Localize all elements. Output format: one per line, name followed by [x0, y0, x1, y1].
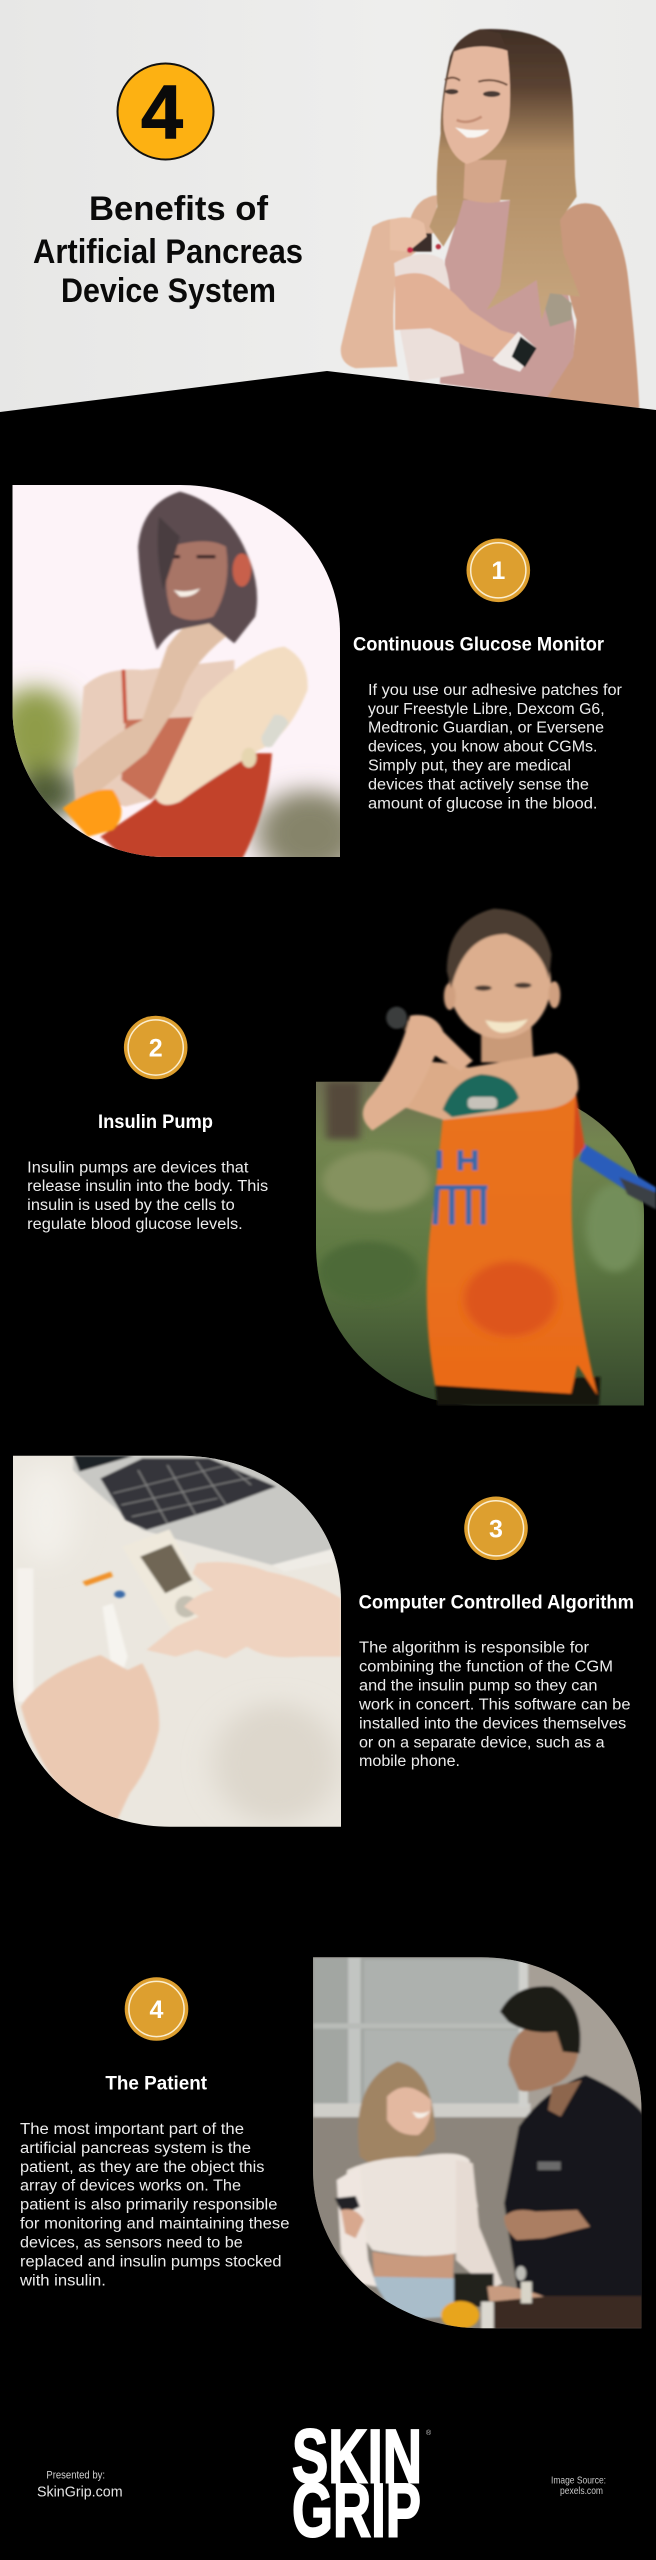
heading: Computer Controlled Algorithm: [359, 1591, 634, 1613]
number badge 1: 1: [491, 557, 505, 585]
presented by credit: Presented by:: [46, 2470, 105, 2482]
image source credit: [551, 2475, 606, 2497]
panel: 3 computer controlled algorithm: [0, 1450, 634, 1830]
body text: [358, 1640, 630, 1770]
heading: Continuous Glucose Monitor: [353, 634, 604, 656]
number badge 2: 2: [149, 1034, 163, 1062]
body text: with insulin.: [19, 2272, 106, 2289]
number badge 4: [125, 1977, 188, 2041]
title: Artificial Pancreas: [33, 233, 303, 271]
body text: combining the function of the CGM: [359, 1659, 613, 1676]
body text: insulin is used by the cells to: [27, 1197, 235, 1214]
body text: patient is also primarily responsible: [20, 2197, 277, 2214]
panel: 2 insulin pump: [27, 909, 656, 1410]
body text: [368, 682, 622, 812]
title: Device System: [61, 272, 276, 310]
body text: [19, 2121, 290, 2289]
body text: If you use our adhesive patches for: [368, 682, 622, 699]
body text: and the insulin pump so they can: [359, 1678, 598, 1695]
body text: amount of glucose in the blood.: [368, 795, 598, 812]
body text: work in concert. This software can be: [358, 1696, 630, 1713]
body text: patient, as they are the object this: [20, 2159, 265, 2176]
heading: Insulin Pump: [98, 1111, 213, 1133]
image source credit: Image Source:: [551, 2475, 606, 2486]
panel: header with woman photo: [0, 0, 656, 430]
panel: 1 continuous glucose monitor: [0, 480, 622, 877]
title: [33, 190, 303, 310]
panel: footer: [37, 2414, 606, 2554]
photo: woman wearing a glucose sensor: [12, 485, 340, 857]
body text: release insulin into the body. This: [27, 1178, 268, 1195]
panel: 4 the patient: [19, 1950, 645, 2335]
body text: [27, 1159, 268, 1233]
title: Benefits of: [89, 190, 269, 228]
photo: boy with baseball bat and arm patch: [310, 909, 656, 1410]
black chevron edge: [0, 371, 656, 430]
body text: mobile phone.: [359, 1753, 460, 1770]
presented by credit: [37, 2470, 123, 2501]
photo: woman holding a water bottle: [341, 29, 639, 408]
body text: devices, you know about CGMs.: [368, 739, 598, 756]
logo: Skin Grip: GRIP: [292, 2468, 421, 2554]
image source credit: pexels.com: [560, 2486, 603, 2497]
body text: or on a separate device, such as a: [359, 1734, 605, 1751]
body text: Simply put, they are medical: [368, 758, 571, 775]
photo: couple talking in a kitchen: [310, 1950, 645, 2335]
body text: devices, as sensors need to be: [20, 2234, 243, 2251]
number badge 3: 3: [489, 1515, 503, 1543]
body text: Insulin pumps are devices that: [27, 1159, 249, 1176]
body text: devices that actively sense the: [368, 776, 589, 793]
body text: The algorithm is responsible for: [359, 1640, 589, 1657]
body text: your Freestyle Libre, Dexcom G6,: [368, 701, 605, 718]
logo: Skin Grip: [292, 2414, 432, 2554]
presented by credit: SkinGrip.com: [37, 2484, 123, 2501]
heading: The Patient: [105, 2072, 207, 2094]
body text: for monitoring and maintaining these: [20, 2216, 290, 2233]
number badge 1: [466, 538, 530, 602]
body text: artificial pancreas system is the: [20, 2140, 251, 2157]
body text: Medtronic Guardian, or Eversene: [368, 720, 604, 737]
title badge: number 4: 4: [141, 70, 183, 155]
body text: installed into the devices themselves: [359, 1715, 627, 1732]
logo: Skin Grip: ®: [426, 2429, 432, 2437]
body text: The most important part of the: [20, 2121, 244, 2138]
logo: Skin Grip: SKIN: [292, 2414, 422, 2500]
title badge: number 4: [118, 64, 214, 160]
number badge 4: 4: [150, 1996, 164, 2024]
photo: hands using a glucose meter by a laptop: [0, 1450, 345, 1830]
number badge 3: [464, 1496, 528, 1560]
body text: regulate blood glucose levels.: [27, 1216, 243, 1233]
body text: replaced and insulin pumps stocked: [20, 2253, 282, 2270]
number badge 2: [124, 1016, 188, 1079]
body text: array of devices works on. The: [20, 2178, 241, 2195]
